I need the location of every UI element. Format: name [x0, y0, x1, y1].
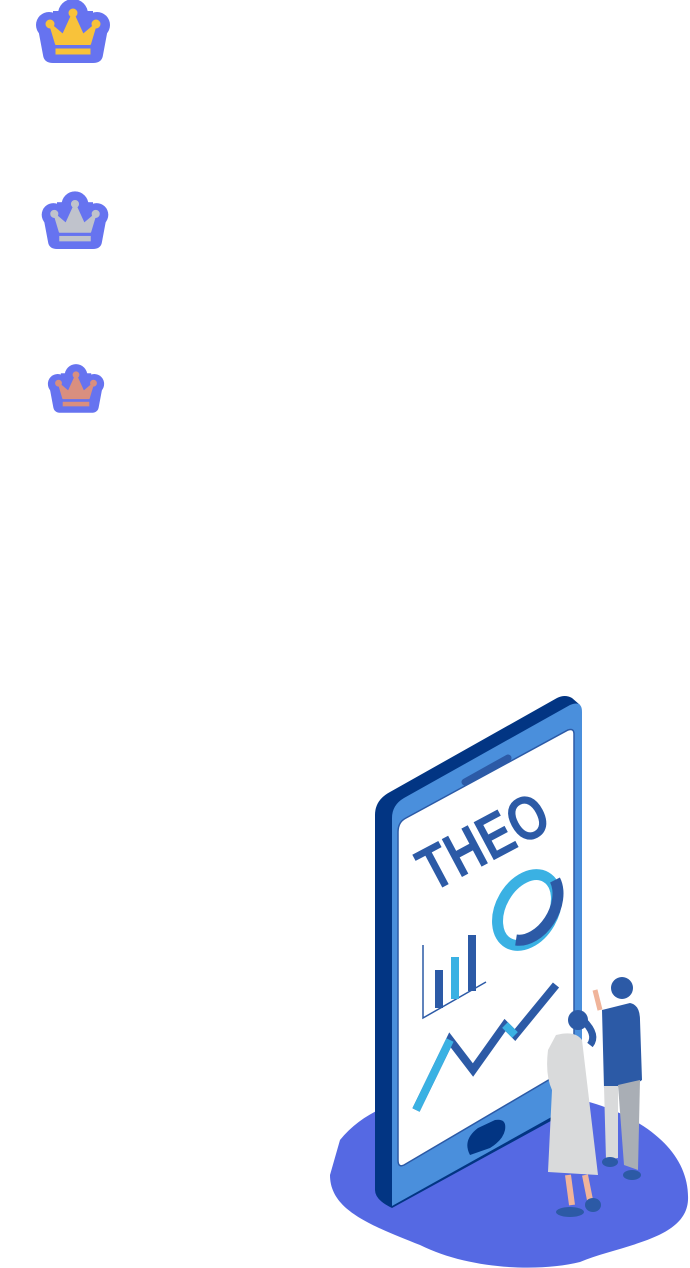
home button [467, 1120, 505, 1155]
line chart [416, 985, 556, 1110]
screen [398, 730, 574, 1166]
icon: silver crown [42, 191, 108, 249]
bar chart [423, 935, 486, 1018]
donut [485, 864, 569, 956]
man [595, 977, 642, 1180]
icon: bronze crown [48, 364, 104, 413]
woman [547, 1010, 601, 1217]
speaker [465, 758, 508, 782]
blob [330, 1089, 688, 1268]
illustration: phone with people [330, 696, 688, 1268]
phone back [375, 696, 580, 1208]
THEO text: THEO [406, 778, 561, 905]
phone front [392, 704, 582, 1206]
icon: gold crown [36, 0, 110, 63]
